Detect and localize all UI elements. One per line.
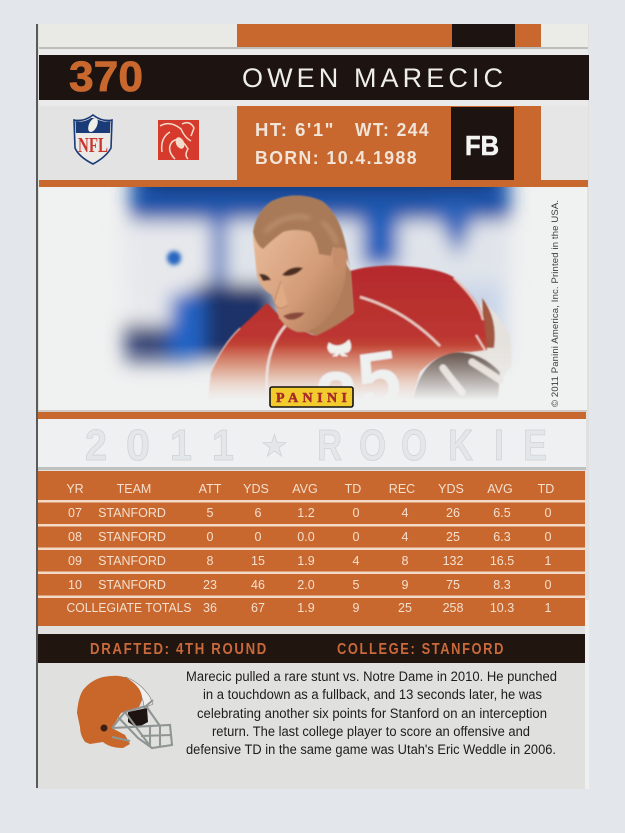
row 2007: 0 [545, 506, 552, 520]
embossed 2011 rookie: R [317, 421, 342, 470]
row 2008: 0 [207, 530, 214, 544]
eyes [259, 267, 303, 281]
college: COLLEGE: STANFORD [337, 641, 505, 658]
row 2007: 6.5 [493, 506, 511, 520]
neck [278, 262, 354, 336]
collegiate totals row: 258 [443, 601, 463, 615]
name bar [39, 53, 589, 101]
embossed 2011 rookie: K [448, 421, 473, 470]
row 2009: 1.9 [297, 554, 315, 568]
row 2007: 0 [353, 506, 360, 520]
top colour stripe [39, 24, 588, 49]
collegiate totals row: COLLEGIATE TOTALS [66, 601, 192, 615]
row 2007: 26 [446, 506, 460, 520]
red jersey [209, 264, 488, 395]
header row: YDS [243, 482, 269, 496]
row 2008: 0 [353, 530, 360, 544]
icon: browns helmet [77, 676, 172, 748]
header row: AVG [292, 482, 318, 496]
collegiate totals row: 1 [545, 601, 552, 615]
row 2009: 16.5 [490, 554, 514, 568]
header row: AVG [487, 482, 513, 496]
drafted: DRAFTED: 4TH ROUND [90, 641, 268, 658]
row 2007: 5 [207, 506, 214, 520]
blurred stadium backdrop [122, 165, 510, 366]
orange rule under bio [39, 180, 588, 187]
row 2009 [68, 554, 552, 568]
row 2007 [68, 506, 552, 520]
hair [253, 196, 350, 268]
collegiate totals row: 1.9 [297, 601, 315, 615]
row 2010: 46 [251, 578, 265, 592]
backdrop letter counter [167, 251, 181, 265]
biography text: in a touchdown as a fullback, and 13 seconds later, he was [203, 687, 542, 702]
height: HT: 6'1" [255, 120, 335, 140]
embossed 2011 rookie: 0 [126, 421, 150, 470]
biography text: Marecic pulled a rare stunt vs. Notre Dame in 2010. He punched [186, 669, 557, 684]
row 2009: 15 [251, 554, 265, 568]
embossed 2011 rookie: I [494, 421, 504, 470]
collegiate totals row [66, 601, 552, 615]
biography text [186, 669, 557, 757]
row 2010: 0 [545, 578, 552, 592]
row 2010: STANFORD [98, 578, 166, 592]
jersey number 2: 2 [315, 357, 357, 442]
row 2009: 4 [353, 554, 360, 568]
row 2007: 6 [255, 506, 262, 520]
embossed 2011 rookie [38, 419, 586, 470]
row 2008: 6.3 [493, 530, 511, 544]
header row: TD [538, 482, 554, 496]
collegiate totals row: 36 [203, 601, 217, 615]
row 2010: 5 [353, 578, 360, 592]
row 2010: 8.3 [493, 578, 511, 592]
embossed 2011 rookie: 1 [212, 421, 234, 470]
row 2008: 0 [255, 530, 262, 544]
player name: OWEN MARECIC [242, 63, 503, 93]
row 2007: 07 [68, 506, 82, 520]
row 2010: 23 [203, 578, 217, 592]
card number: 370 [69, 53, 143, 101]
collegiate totals row: 10.3 [490, 601, 514, 615]
embossed 2011 rookie: ★ [261, 429, 288, 464]
collegiate totals row: 9 [353, 601, 360, 615]
embossed 2011 rookie: E [523, 421, 547, 470]
biography text: defensive TD in the same game was Utah's Eric Weddle in 2006. [186, 742, 556, 757]
embossed 2011 rookie: 1 [170, 421, 192, 470]
icon: NFL shield [74, 115, 112, 164]
copyright line: © 2011 Panini America, Inc. Printed in the USA. [550, 200, 561, 407]
row 2010: 10 [68, 578, 82, 592]
stats table [38, 471, 585, 626]
biography text: return. The last college player to score an offensive and [212, 724, 530, 739]
header row: ATT [199, 482, 222, 496]
row 2009: 09 [68, 554, 82, 568]
embossed 2011 rookie: O [401, 421, 427, 470]
panini logo [270, 387, 353, 407]
forearm and ball [413, 298, 512, 400]
row 2010: 9 [402, 578, 409, 592]
row 2010 [68, 578, 552, 592]
row 2008: 25 [446, 530, 460, 544]
row 2009: 8 [207, 554, 214, 568]
head [253, 196, 350, 332]
weight: WT: 244 [355, 120, 430, 140]
header row: YDS [438, 482, 464, 496]
header row: YR [66, 482, 84, 496]
mouth [283, 312, 305, 320]
player photo [39, 187, 587, 410]
icon: NFL shield: NFL [78, 133, 108, 157]
embossed 2011 rookie: O [359, 421, 386, 470]
header row [66, 482, 554, 496]
header row: REC [389, 482, 415, 496]
row 2007: 4 [402, 506, 409, 520]
row 2010: 75 [446, 578, 460, 592]
position: FB [465, 130, 499, 161]
row 2008: 08 [68, 530, 82, 544]
ear [334, 247, 347, 258]
row 2010: 2.0 [297, 578, 315, 592]
bio panel [39, 100, 588, 180]
row 2009: 8 [402, 554, 409, 568]
row 2008: 0.0 [297, 530, 315, 544]
jersey number 5: 5 [352, 334, 406, 424]
header row: TD [345, 482, 361, 496]
row 2009: 132 [443, 554, 463, 568]
draft bar [38, 634, 585, 663]
row 2008: 4 [402, 530, 409, 544]
row 2008: 0 [545, 530, 552, 544]
header row: TEAM [117, 482, 151, 496]
collegiate totals row: 67 [251, 601, 265, 615]
row 2008 [68, 530, 552, 544]
icon: red football player [158, 120, 199, 160]
row 2009: 1 [545, 554, 552, 568]
nose [274, 281, 288, 308]
biography text: celebrating another six points for Stanford on an interception [197, 706, 547, 721]
row 2008: STANFORD [98, 530, 166, 544]
collegiate totals row: 25 [398, 601, 412, 615]
birth date: BORN: 10.4.1988 [255, 148, 418, 168]
embossed 2011 rookie: 2 [85, 421, 107, 470]
under armour logo [328, 340, 351, 356]
panini logo: PANINI [276, 391, 347, 406]
row 2007: 1.2 [297, 506, 315, 520]
row 2009: STANFORD [98, 554, 166, 568]
orange rule under photo [38, 410, 587, 419]
row 2007: STANFORD [98, 506, 166, 520]
